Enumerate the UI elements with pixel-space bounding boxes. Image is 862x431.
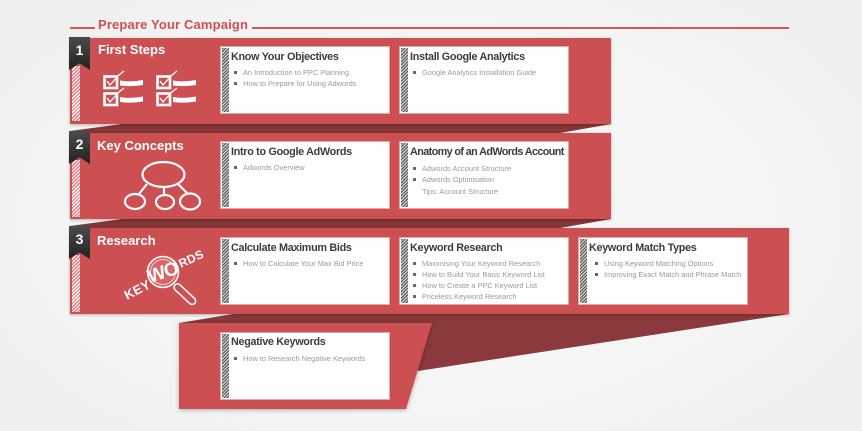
title rule left xyxy=(70,27,95,29)
card: keyword match types: Using Keyword Matching Options xyxy=(604,259,713,268)
card: install google analytics: Install Google Analytics xyxy=(410,50,525,62)
card: know your objectives: Know Your Objectives xyxy=(231,50,339,62)
ribbon 2 xyxy=(69,131,90,164)
card: anatomy of an adwords account: Adwords Account Structure xyxy=(422,164,511,173)
card: keyword match types: Keyword Match Types xyxy=(589,242,696,254)
card: keyword research: Maximising Your Keyword Research xyxy=(422,259,540,268)
heading: research: Research xyxy=(97,233,156,248)
card: know your objectives: How to Prepare for Using Adwords xyxy=(243,79,356,88)
ribbon 2: 2 xyxy=(76,136,83,152)
card: anatomy of an adwords account xyxy=(400,142,568,208)
ribbon 3: 3 xyxy=(76,231,83,247)
card: intro to google adwords xyxy=(221,142,389,208)
title rule right xyxy=(252,27,789,29)
card: intro to google adwords: Intro to Google AdWords xyxy=(231,146,352,158)
card: anatomy of an adwords account: Anatomy of an AdWords Account xyxy=(410,146,564,158)
card: install google analytics xyxy=(400,47,568,113)
ribbon 1 xyxy=(69,37,90,70)
card: calculate maximum bids xyxy=(221,238,389,304)
card: know your objectives xyxy=(221,47,389,113)
card: keyword match types xyxy=(579,238,747,304)
ribbon 3 xyxy=(69,226,90,259)
heading: key concepts: Key Concepts xyxy=(97,138,184,153)
icon: keywords magnifier: KEY xyxy=(122,277,153,303)
card: install google analytics: Google Analytics Installation Guide xyxy=(422,68,536,77)
card: calculate maximum bids: Calculate Maximum Bids xyxy=(231,242,352,254)
card: negative keywords xyxy=(221,333,389,399)
panel: key concepts xyxy=(70,133,611,219)
card: keyword research: Keyword Research xyxy=(410,242,502,254)
card: know your objectives: An Introduction to PPC Planning xyxy=(243,68,349,77)
card: anatomy of an adwords account: Adwords Optimisation xyxy=(422,175,494,184)
title: Prepare Your Campaign xyxy=(98,17,248,32)
heading: first steps: First Steps xyxy=(98,42,165,57)
card: calculate maximum bids: How to Calculate Your Max Bid Price xyxy=(243,259,363,268)
panel: research xyxy=(70,228,789,314)
icon: keywords magnifier: RDS xyxy=(176,247,206,271)
icon: keywords magnifier: WO xyxy=(145,258,181,288)
card: keyword research xyxy=(400,238,568,304)
card: keyword match types: Improving Exact Match and Phrase Match xyxy=(604,270,741,279)
card: keyword research: Priceless Keyword Research xyxy=(422,292,516,301)
card: keyword research: How to Build Your Basic Keyword List xyxy=(422,270,545,279)
panel: first steps xyxy=(70,38,611,124)
card: keyword research: How to Create a PPC Keyword List xyxy=(422,281,537,290)
card: intro to google adwords: Adwords Overview xyxy=(243,163,305,172)
ribbon 1: 1 xyxy=(76,42,83,58)
card: negative keywords: Negative Keywords xyxy=(231,336,326,348)
stripe 3 xyxy=(72,255,80,312)
stripe 1 xyxy=(72,66,80,121)
card: anatomy of an adwords account: Tips: Account Structure xyxy=(422,187,498,196)
stripe 2 xyxy=(72,160,80,217)
card: negative keywords: How to Research Negative Keywords xyxy=(243,354,365,363)
